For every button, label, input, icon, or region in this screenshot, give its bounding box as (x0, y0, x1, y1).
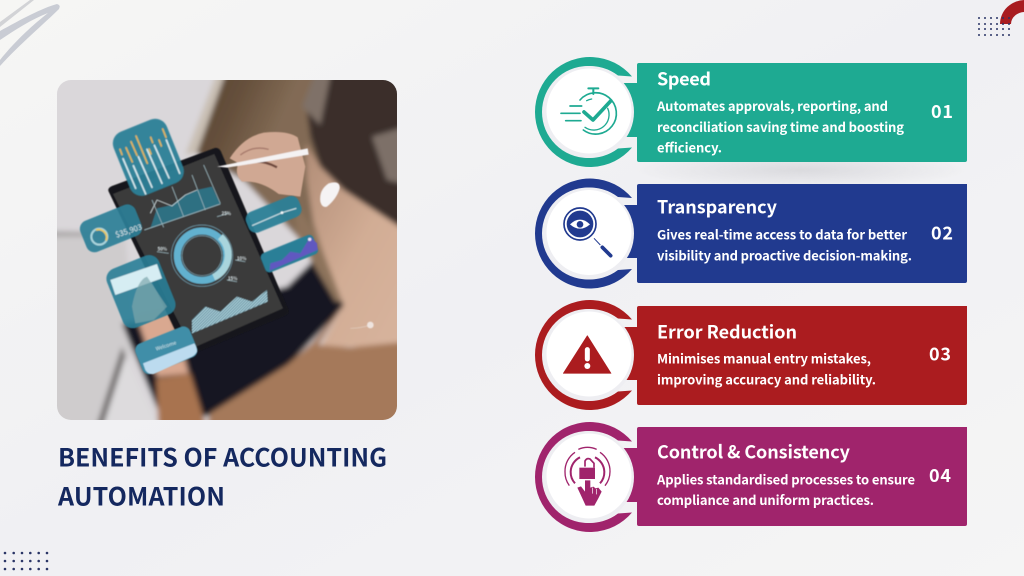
text 1: reconciliation saving time and boosting (657, 117, 904, 136)
floating card: balance (79, 204, 143, 253)
panel 3: error reduction (535, 300, 967, 410)
text 2: Gives real-time access to data for better (657, 224, 907, 243)
card 4 (618, 427, 967, 526)
panel 1: speed (535, 57, 967, 167)
ring 4 (535, 422, 632, 532)
number 2: 02 (931, 220, 953, 246)
number 4: 04 (929, 462, 951, 488)
icon: warning triangle (563, 336, 611, 373)
floating card: bars: Welcome (155, 339, 178, 353)
text 2 (657, 224, 912, 264)
ring 3 (535, 300, 632, 410)
card 1 (618, 63, 967, 162)
dot grid bottom left (4, 552, 48, 570)
icon: stopwatch with check (561, 88, 616, 134)
floating card: area chart (259, 233, 319, 274)
ring 1 (535, 57, 632, 167)
title: AUTOMATION (57, 478, 225, 514)
icon: magnifier with eye (564, 208, 611, 256)
tablet (108, 148, 288, 354)
necklace (350, 322, 374, 328)
dot grid top right (978, 17, 1010, 36)
card 3 (618, 306, 967, 405)
tablet: 25% (222, 211, 232, 217)
tablet: 10% (237, 256, 247, 262)
panel 4: control and consistency (535, 422, 967, 532)
disc 1 (542, 66, 634, 158)
disc 2 (542, 188, 634, 280)
ring 2 (535, 178, 632, 288)
heading 3: Error Reduction (657, 318, 797, 344)
panel 2: transparency (535, 178, 967, 288)
text 3: improving accuracy and reliability. (657, 369, 876, 388)
tablet: 15% (228, 276, 238, 282)
heading 4: Control & Consistency (657, 438, 851, 464)
text 4: compliance and uniform practices. (657, 490, 874, 509)
floating card: bars: $35,903 (114, 222, 144, 241)
floating card: transfer (106, 254, 176, 329)
floating card: welcome (133, 324, 200, 376)
soft shadow under first panel (635, 152, 965, 188)
floating card: bars (77, 115, 319, 376)
decorative scribble top left (0, 0, 60, 66)
tablet: 50% (158, 247, 168, 253)
decorative arc top right (1000, 0, 1024, 24)
text 3: Minimises manual entry mistakes, (657, 348, 871, 367)
text 2: visibility and proactive decision-making. (657, 245, 912, 264)
text 4: Applies standardised processes to ensure (656, 470, 915, 488)
text 1: Automates approvals, reporting, and (656, 96, 888, 115)
title: BENEFITS OF ACCOUNTING (58, 438, 387, 474)
title (57, 438, 387, 514)
floating card: slider (245, 195, 302, 234)
text 4 (656, 470, 915, 509)
disc 3 (542, 309, 634, 401)
card 2 (618, 184, 967, 283)
number 1: 01 (931, 98, 953, 124)
stylus and hand (217, 132, 340, 207)
disc 4 (542, 431, 634, 523)
heading 2: Transparency (657, 194, 778, 220)
photo: person using tablet with floating dashboards (57, 80, 397, 420)
heading 1: Speed (657, 66, 711, 92)
text 3 (657, 348, 876, 388)
text 1: efficiency. (657, 138, 722, 157)
text 1 (656, 96, 904, 157)
icon: hand pressing control (565, 447, 610, 506)
number 3: 03 (929, 340, 951, 366)
